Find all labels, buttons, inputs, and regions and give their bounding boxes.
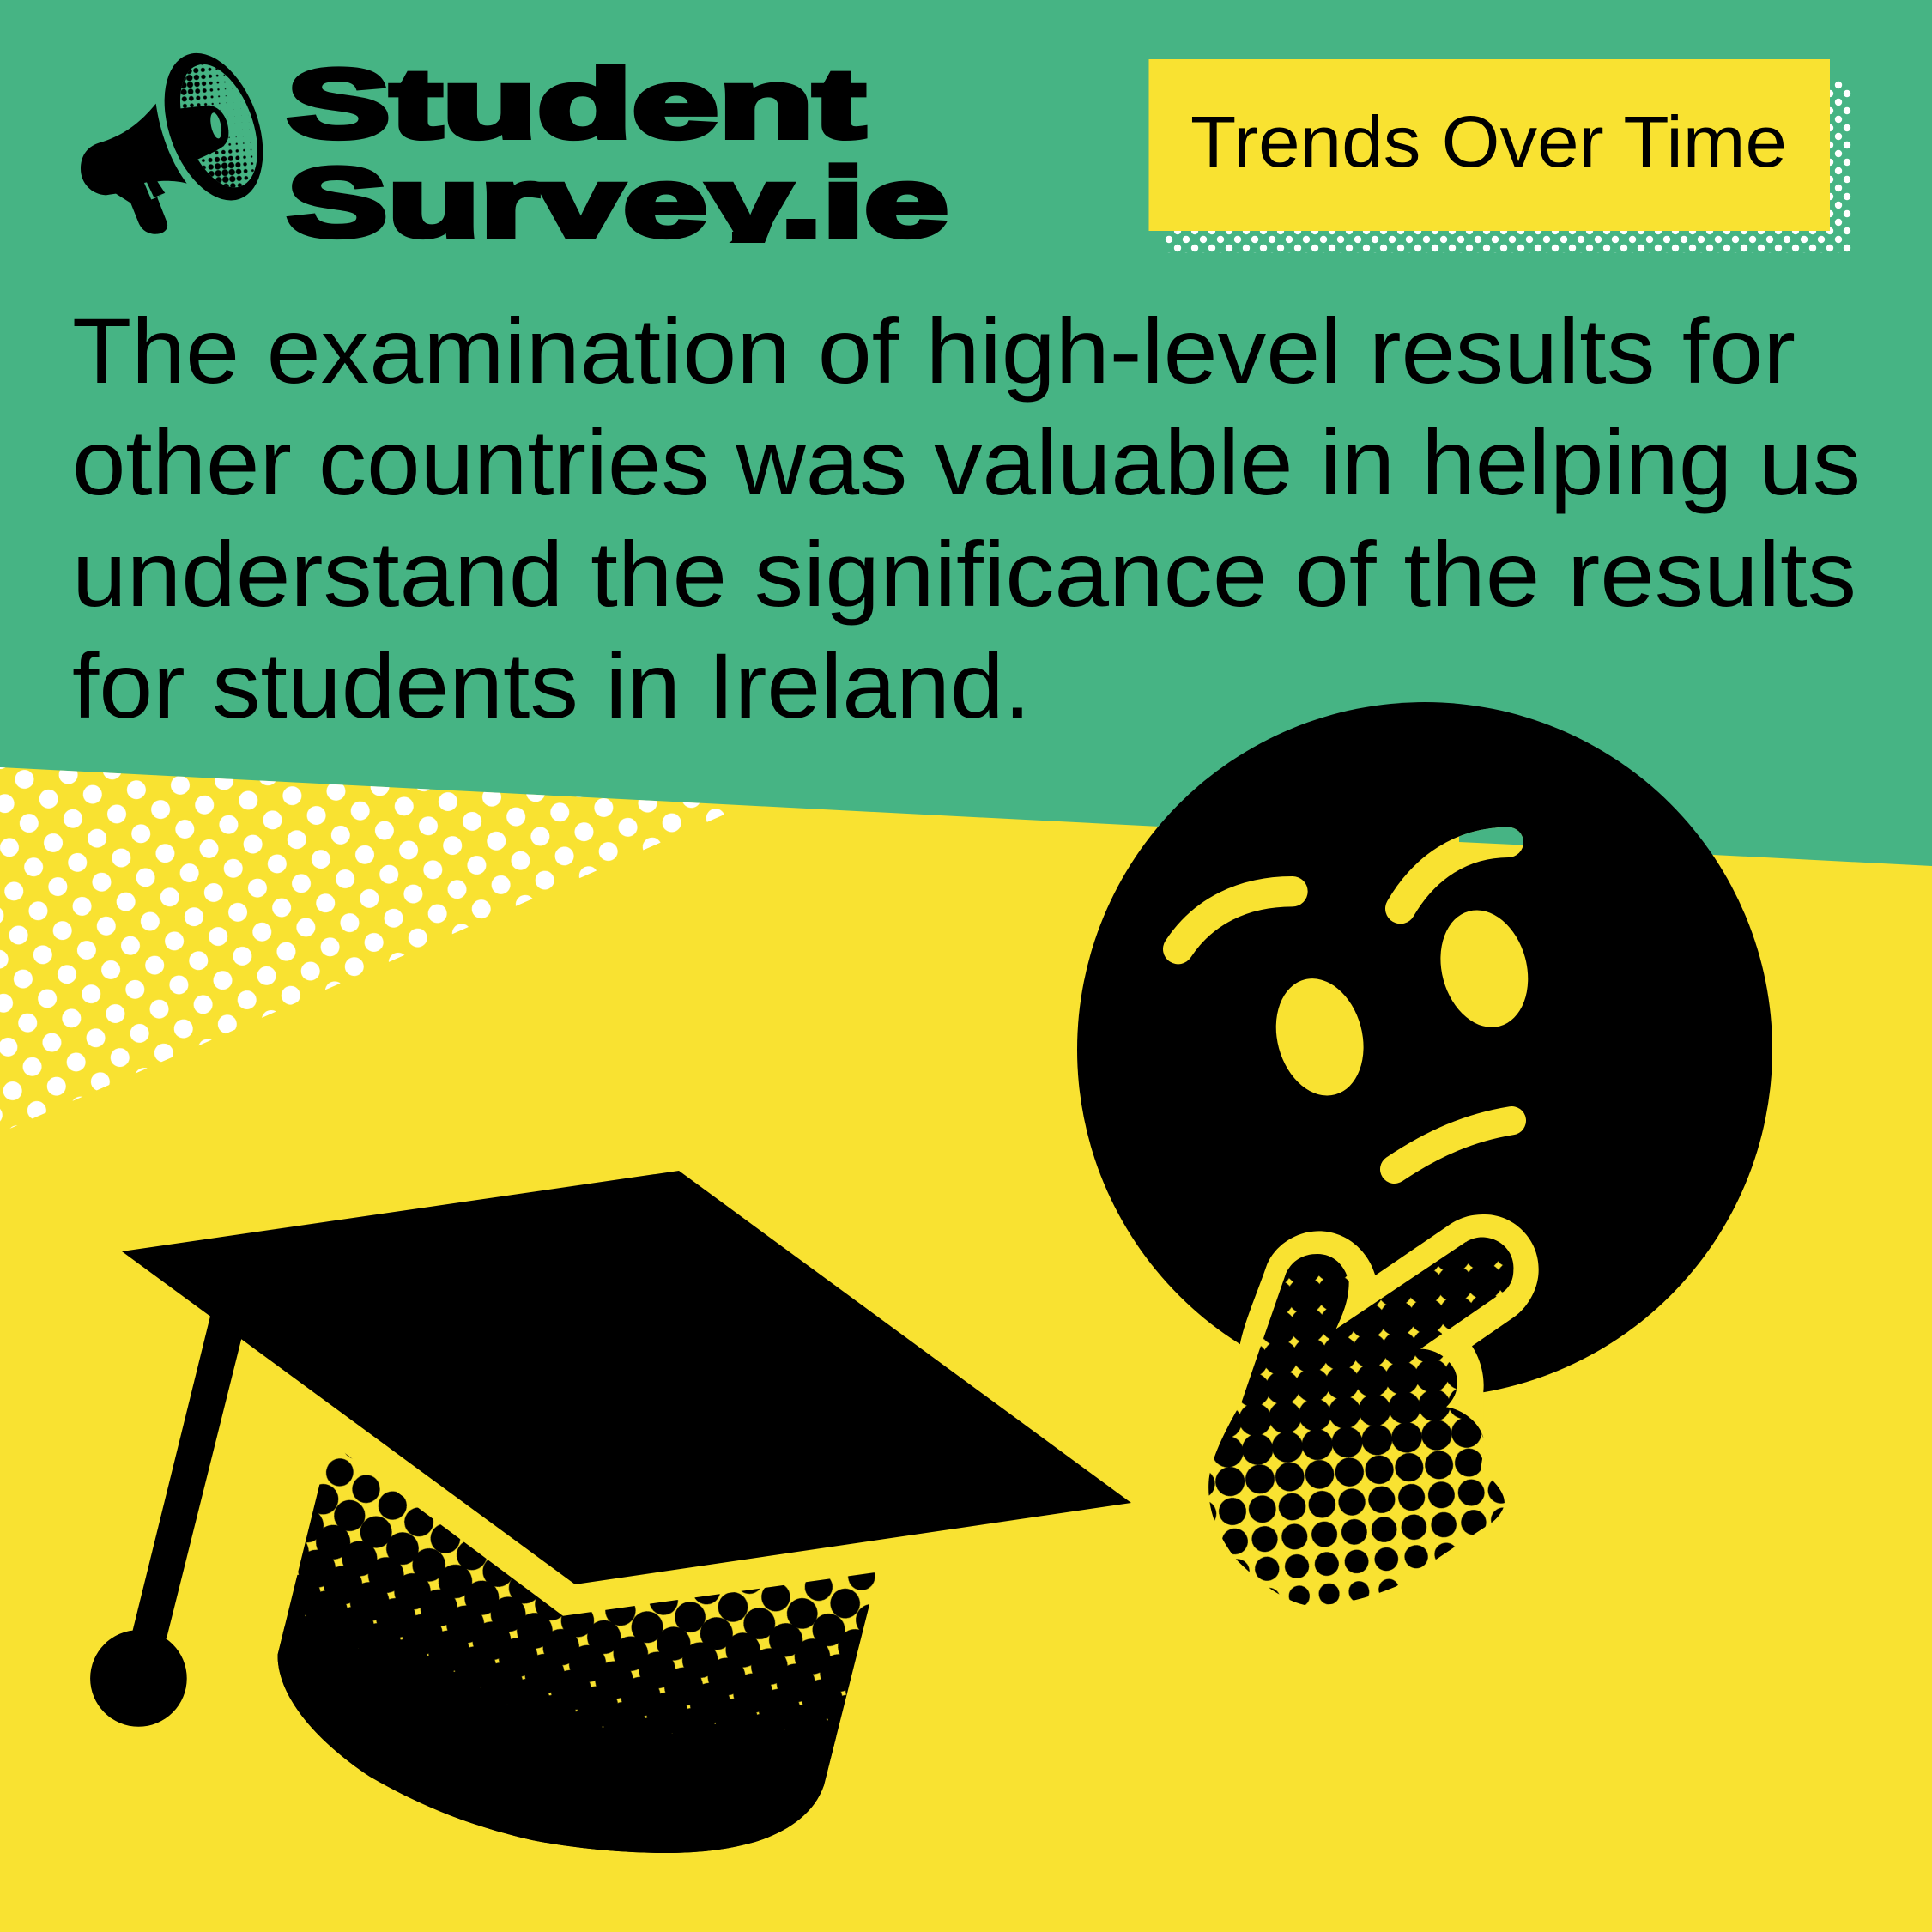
badge yellow box [1148, 59, 1830, 231]
badge dotted shadow [1165, 81, 1851, 253]
logo word: Student: Student [287, 50, 865, 159]
halftone cap base [278, 1452, 875, 1853]
logo word: Survey.ie: Survey.ie [287, 148, 948, 257]
face circle [1077, 702, 1772, 1397]
white halftone dot triangle [0, 767, 724, 1129]
logo word: Survey.ie [287, 162, 948, 243]
tassel ball [90, 1630, 187, 1727]
hand outline [1240, 1214, 1539, 1470]
badge: Trends Over Time [1148, 59, 1851, 253]
green part of right eyebrow [1459, 827, 1523, 845]
yellow lower panel [0, 767, 1932, 1932]
icon: thinking face [1077, 702, 1772, 1631]
icon: graduation cap [90, 1171, 1131, 1888]
icon: megaphone [81, 53, 263, 234]
halftone hand [1208, 1238, 1514, 1605]
badge label: Trends Over Time [1190, 101, 1787, 182]
cap top board [122, 1171, 1131, 1584]
main statement text: other countries was valuable in helping us [72, 410, 1861, 514]
face features [1178, 842, 1541, 1169]
logo: StudentSurvey.ie [81, 53, 948, 243]
main statement text: for students in Ireland. [72, 633, 1031, 737]
main statement text: understand the significance of the results [72, 522, 1856, 626]
tassel stem [132, 1292, 247, 1638]
main statement text [72, 299, 1861, 737]
main statement text: The examination of high-level results for [72, 299, 1796, 403]
